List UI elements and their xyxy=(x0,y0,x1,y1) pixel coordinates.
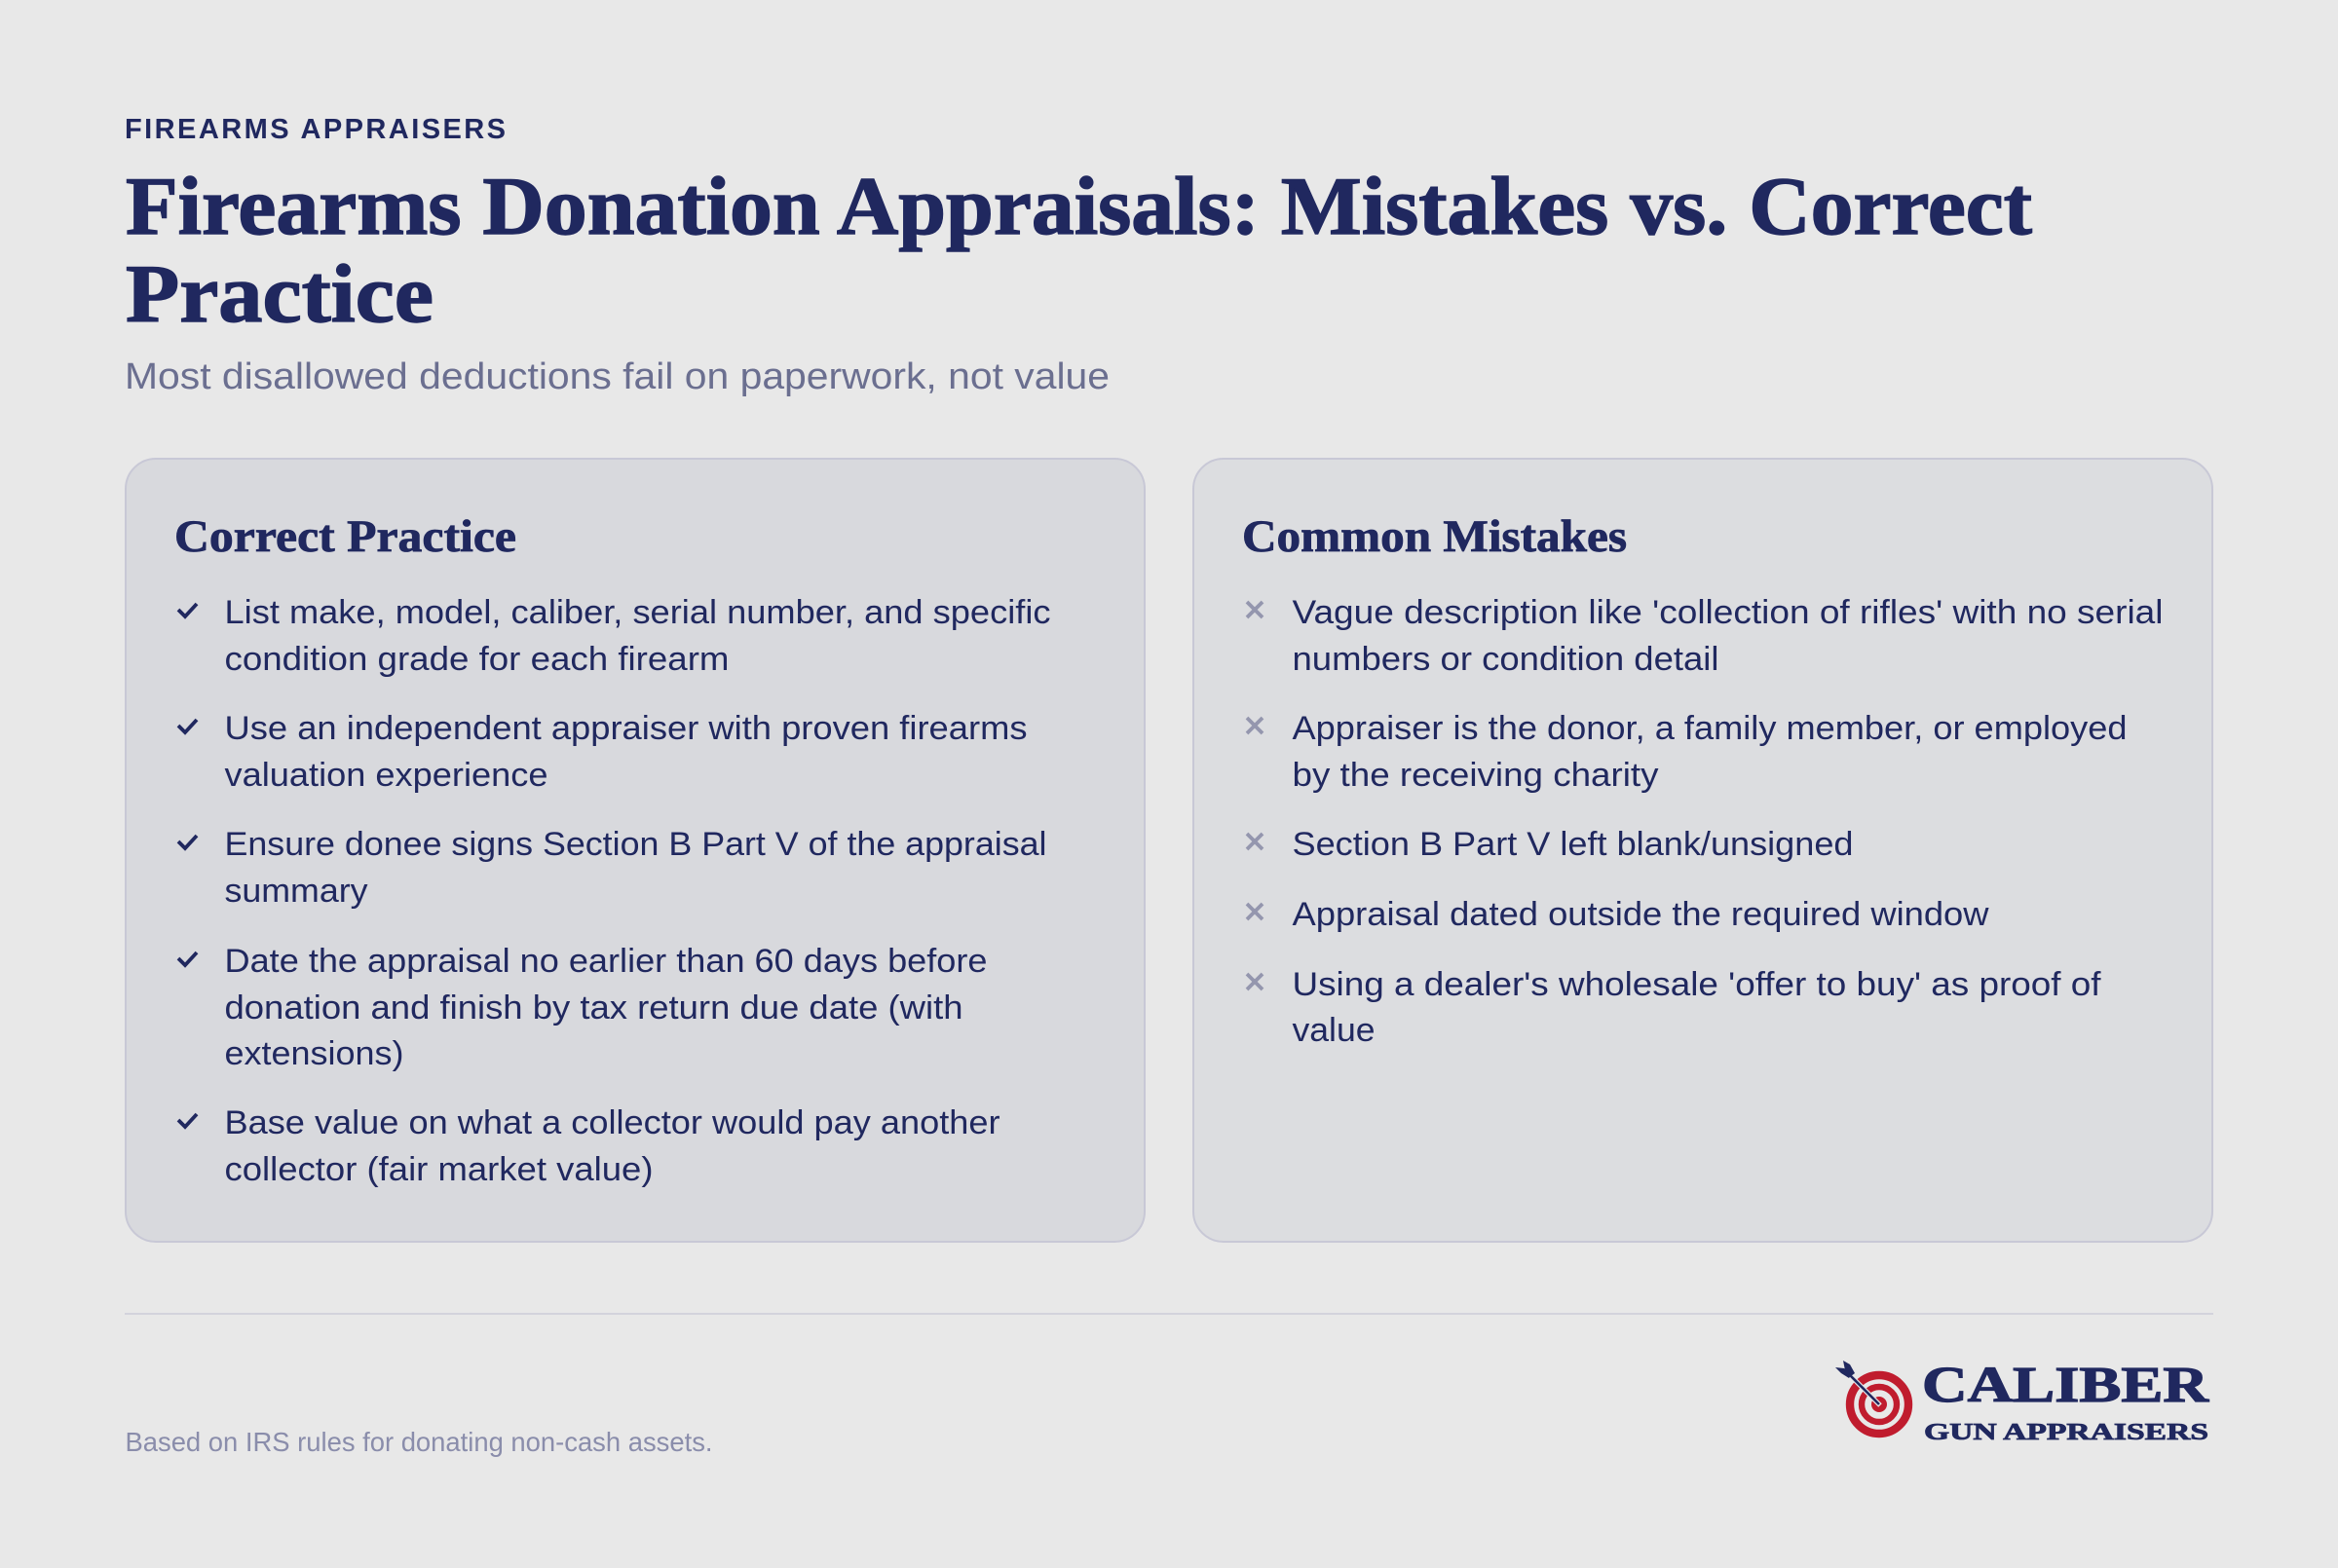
item: appraiser independence xyxy=(1247,710,2128,794)
panel: common mistakes xyxy=(1193,459,2212,1242)
item: appraiser independence: Appraiser is the donor, a family member, or employed xyxy=(1292,710,2128,747)
item: fair market value xyxy=(178,1104,999,1188)
heading: correct practice: Correct Practice xyxy=(174,511,516,562)
item: appraisal date: extensions) xyxy=(224,1035,403,1072)
item: section left blank: Section B Part V left blank/unsigned xyxy=(1292,826,1853,863)
item: vague description xyxy=(1247,594,2163,678)
item: fair market value: Base value on what a collector would pay another xyxy=(224,1104,999,1141)
item: fair market value: collector (fair market value) xyxy=(224,1151,653,1188)
item: independent appraiser: Use an independent appraiser with proven firearms xyxy=(224,710,1027,747)
item: donee signature: Ensure donee signs Section B Part V of the appraisal xyxy=(224,826,1046,863)
item: independent appraiser: valuation experience xyxy=(224,757,547,794)
logo tagline: GUN APPRAISERS xyxy=(1924,1420,2208,1445)
item: appraisal date: Date the appraisal no earlier than 60 days before xyxy=(224,943,988,980)
title: Firearms Donation Appraisals: Mistakes vs. Correct xyxy=(126,161,2032,252)
panel: correct practice xyxy=(126,459,1145,1242)
item: wholesale offer: Using a dealer's wholesale 'offer to buy' as proof of xyxy=(1292,966,2101,1003)
heading: common mistakes: Common Mistakes xyxy=(1242,511,1627,562)
eyebrow label: FIREARMS APPRAISERS xyxy=(125,114,506,145)
item: wholesale offer xyxy=(1247,966,2101,1049)
icon: target with arrow xyxy=(1835,1361,1908,1434)
title xyxy=(126,161,2032,340)
subtitle: Most disallowed deductions fail on paperwork, not value xyxy=(125,356,1110,397)
item: list details xyxy=(178,594,1050,678)
item: vague description: Vague description like 'collection of rifles' with no serial xyxy=(1292,594,2163,631)
item: donee signature xyxy=(178,826,1046,910)
title: Practice xyxy=(126,248,434,340)
item: appraisal date: donation and finish by tax return due date (with xyxy=(224,989,963,1027)
item: donee signature: summary xyxy=(224,873,368,910)
item: wholesale offer: value xyxy=(1292,1012,1376,1049)
item: dated outside window: Appraisal dated outside the required window xyxy=(1292,896,1989,933)
item: appraisal date xyxy=(178,943,988,1072)
item: independent appraiser xyxy=(178,710,1027,794)
logo: caliber gun appraisers xyxy=(1835,1358,2210,1445)
footer note: Based on IRS rules for donating non-cash assets. xyxy=(125,1427,713,1457)
item: list details: condition grade for each firearm xyxy=(224,641,729,678)
item: vague description: numbers or condition detail xyxy=(1292,641,1718,678)
logo wordmark: CALIBER xyxy=(1922,1358,2210,1413)
item: list details: List make, model, caliber, serial number, and specific xyxy=(224,594,1050,631)
item: appraiser independence: by the receiving charity xyxy=(1292,757,1658,794)
